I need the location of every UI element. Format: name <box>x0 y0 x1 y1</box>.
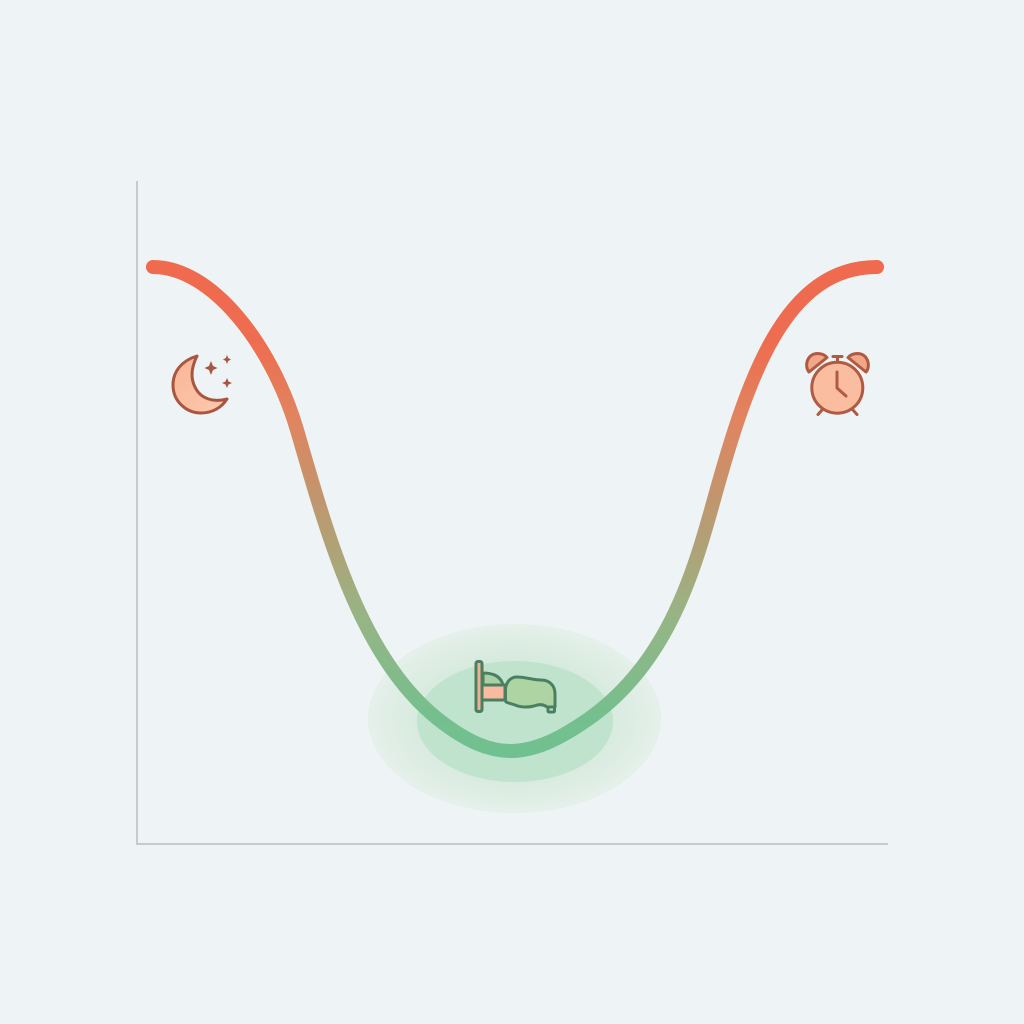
highlight: deep sleep zone <box>368 624 661 813</box>
curve: gradient trough line <box>153 267 877 751</box>
mattress <box>482 685 505 700</box>
icon: crescent moon with stars <box>173 355 232 413</box>
pillow <box>483 673 503 685</box>
headboard <box>476 662 482 712</box>
icon: alarm clock <box>807 354 868 414</box>
blanket tab <box>548 707 554 712</box>
axes <box>137 181 888 844</box>
blanket <box>506 677 555 707</box>
icon: bed <box>476 662 555 712</box>
